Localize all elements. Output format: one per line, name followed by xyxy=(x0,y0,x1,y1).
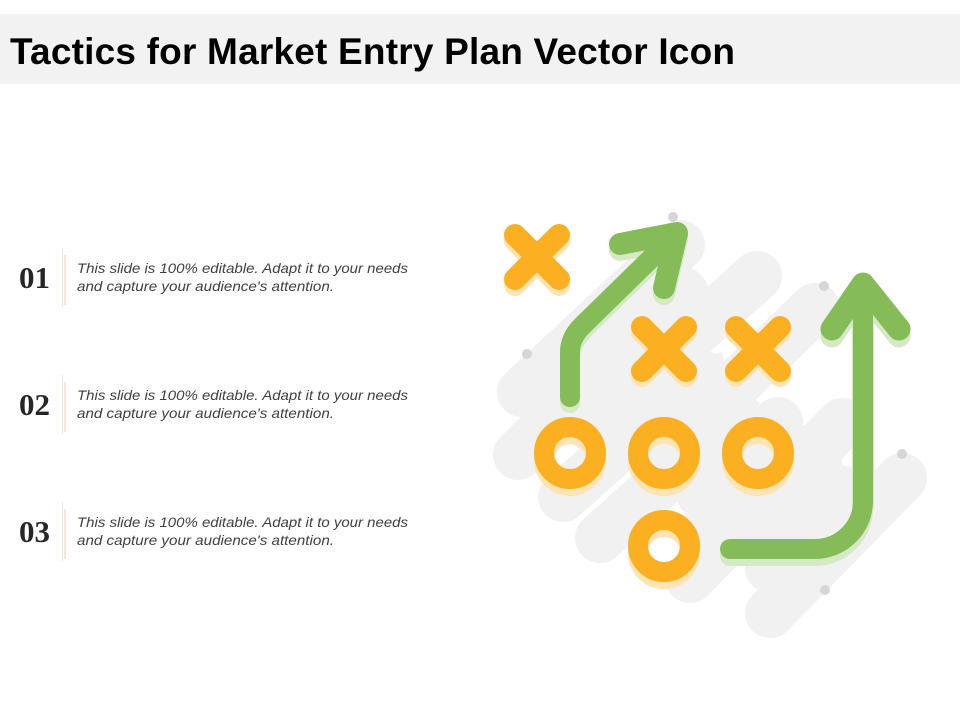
list item 01: and capture your audience's attention. xyxy=(77,278,334,294)
background stripe mass xyxy=(640,352,845,560)
list item 01: 01 xyxy=(19,260,50,295)
list item 03: and capture your audience's attention. xyxy=(77,532,334,548)
icon: market entry tactics play diagram xyxy=(515,212,907,613)
list item 02: This slide is 100% editable. Adapt it to your needs xyxy=(77,387,408,403)
list item 02: 02 xyxy=(19,387,50,422)
title bar xyxy=(0,14,960,84)
decorative grey dots xyxy=(522,212,907,595)
list item 03: 03 xyxy=(19,514,50,549)
list item 03 xyxy=(19,502,408,561)
background diagonal stripes xyxy=(518,245,902,613)
orange crosses xyxy=(515,235,780,371)
green arrow: diagonal move xyxy=(570,233,677,397)
shadows of shapes xyxy=(515,237,899,579)
list item 02: and capture your audience's attention. xyxy=(77,405,334,421)
list item 03: This slide is 100% editable. Adapt it to your needs xyxy=(77,514,408,530)
list item 01: This slide is 100% editable. Adapt it to your needs xyxy=(77,260,408,276)
orange circles xyxy=(544,427,784,572)
list item 01 xyxy=(19,248,408,307)
green arrow: long up move xyxy=(730,284,899,549)
title bar: Tactics for Market Entry Plan Vector Icon xyxy=(10,31,735,72)
list item 02 xyxy=(19,375,408,434)
